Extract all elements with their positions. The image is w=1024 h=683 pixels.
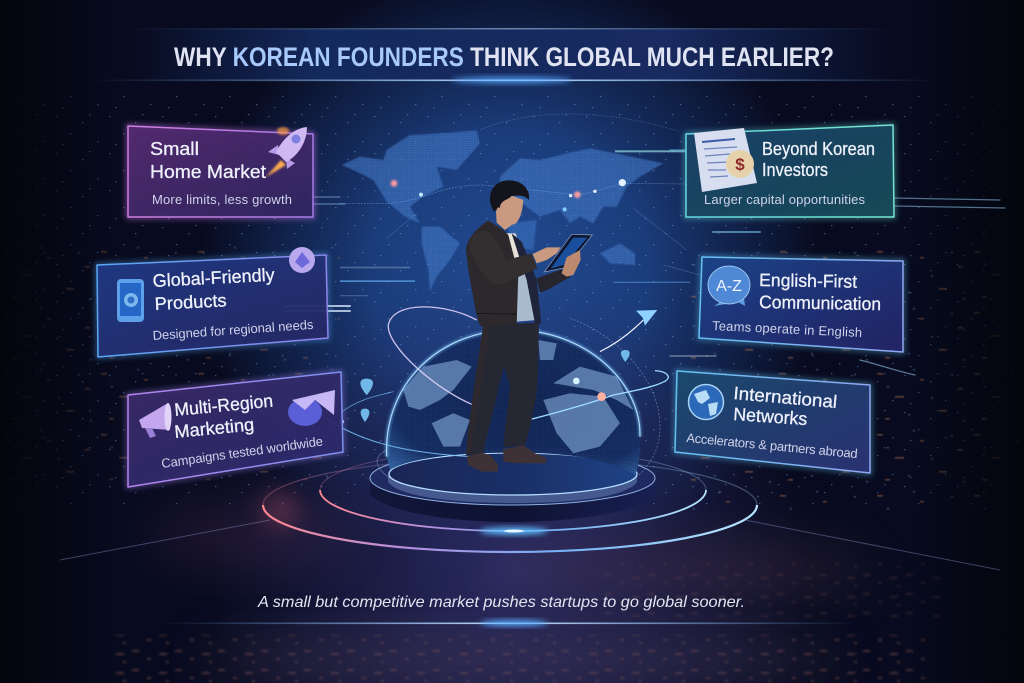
hair — [490, 180, 529, 212]
globe — [377, 318, 660, 480]
heading: English-First — [759, 270, 857, 292]
shoes — [467, 445, 547, 472]
caption: A small but competitive market pushes startups to go global sooner. — [257, 594, 745, 611]
hands — [533, 247, 561, 263]
heading line 2: Networks — [733, 404, 808, 429]
title band — [90, 28, 940, 84]
title: WHY KOREAN FOUNDERS THINK GLOBAL MUCH EARLIER? — [174, 42, 834, 72]
subtext: Larger capital opportunities — [704, 192, 866, 207]
shirt — [505, 233, 537, 322]
panel: international networks — [675, 371, 870, 473]
world map — [340, 114, 700, 296]
platform disc — [389, 453, 637, 495]
back forearm — [537, 269, 571, 293]
neck and face — [496, 195, 523, 230]
subtext: Accelerators & partners abroad — [686, 430, 858, 461]
heading: Home Market — [150, 162, 266, 182]
base rings — [60, 449, 1000, 570]
podium — [370, 451, 655, 522]
panel: english-first communication — [699, 257, 903, 352]
heading line 2: Communication — [759, 292, 881, 314]
icon: circle badge — [289, 247, 315, 273]
jacket — [466, 221, 518, 326]
icon: globe and flag — [288, 390, 335, 426]
bottom rule — [160, 620, 860, 626]
heading: International — [733, 383, 838, 412]
icon: globe — [688, 384, 724, 420]
heading line 2: Products — [154, 290, 227, 314]
panel: small home market — [128, 126, 313, 217]
heading line 2: Marketing — [173, 414, 255, 442]
front arm — [468, 231, 537, 285]
heading: Beyond Korean — [762, 139, 875, 159]
panel: beyond korean investors — [686, 125, 894, 217]
heading: Investors — [762, 160, 828, 180]
panel: multi-region marketing — [128, 372, 343, 487]
icon: document and coin — [694, 128, 757, 192]
icon: A-Z speech bubble — [708, 266, 750, 306]
heading: Global-Friendly — [152, 265, 275, 291]
subtext: More limits, less growth — [152, 192, 292, 207]
connector lines — [285, 150, 1005, 375]
heading: Small — [150, 139, 199, 159]
subtext: Campaigns tested worldwide — [160, 433, 324, 471]
panel: global-friendly products — [97, 247, 328, 357]
icon: phone — [117, 279, 144, 322]
tablet — [544, 234, 592, 272]
icon: megaphone — [139, 403, 172, 438]
icon: document and coin: $ — [735, 155, 745, 174]
subtext: Teams operate in English — [712, 318, 862, 340]
orbit lines — [327, 307, 668, 457]
person — [466, 180, 592, 472]
icon: location markers and arrow — [339, 310, 657, 424]
heading: Multi-Region — [173, 391, 274, 420]
icon: rocket — [266, 127, 307, 177]
icon: A-Z speech bubble: A-Z — [716, 278, 742, 295]
subtext: Designed for regional needs — [152, 317, 314, 343]
trousers — [466, 323, 539, 455]
